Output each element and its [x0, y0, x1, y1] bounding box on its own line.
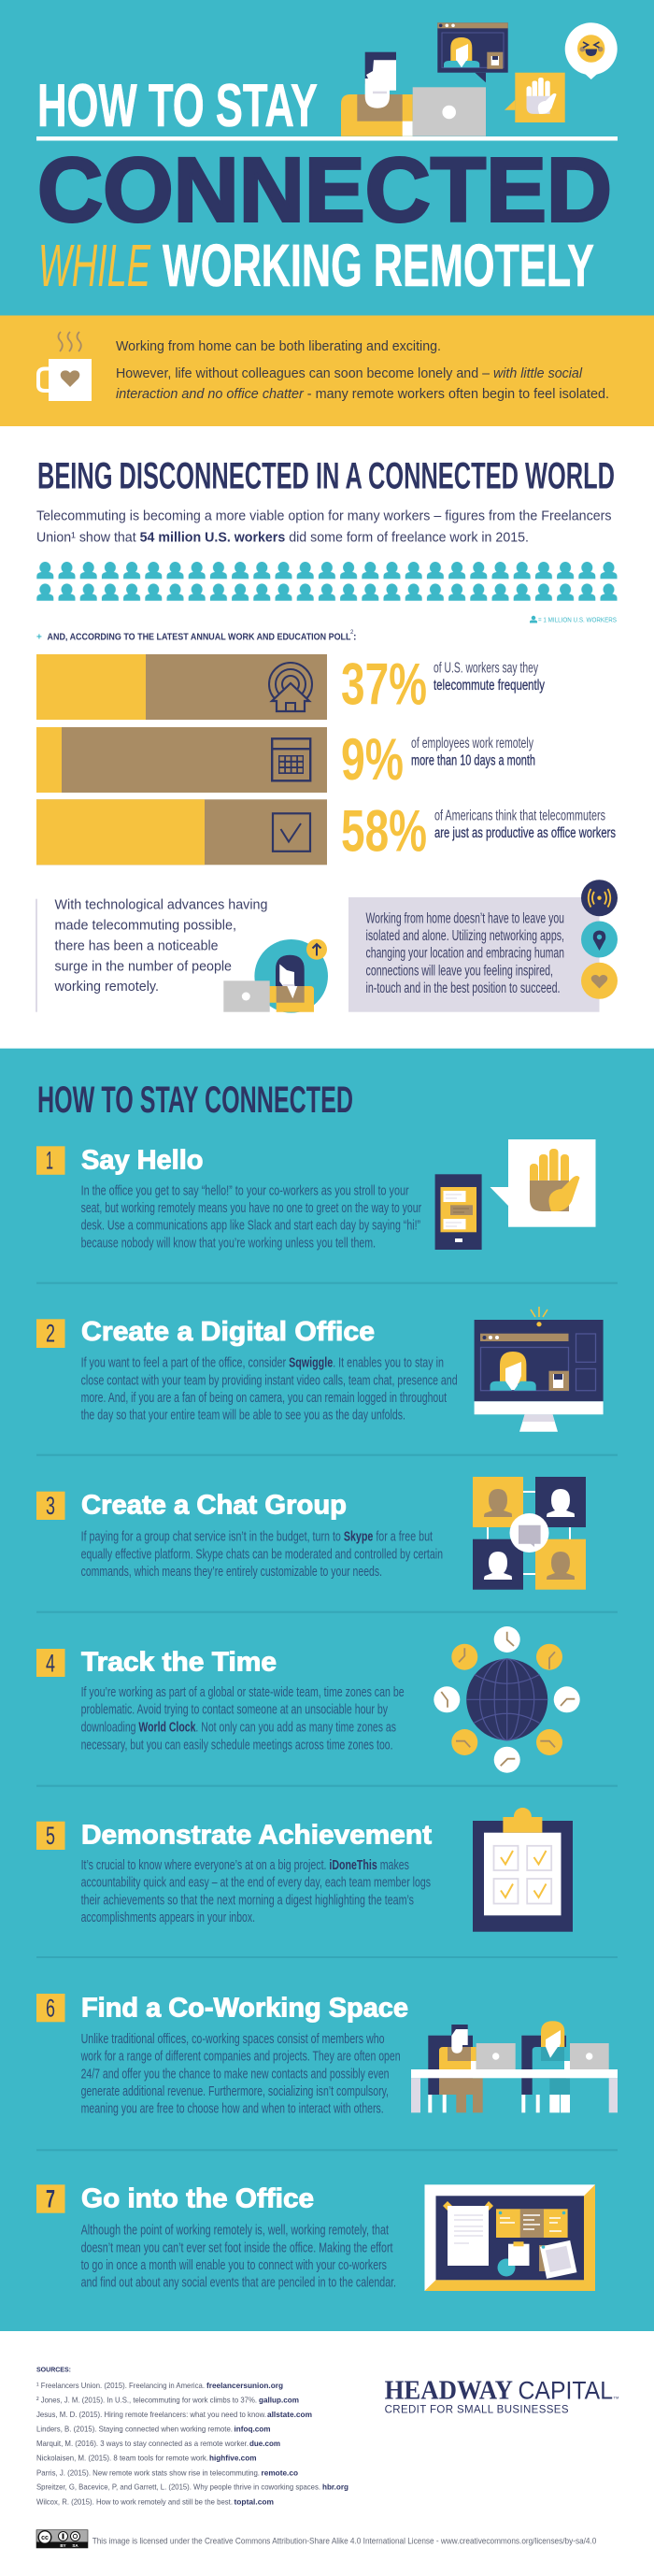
- illustration: smiling emoji bubble: [565, 22, 618, 79]
- legend: one million workers: = 1 MILLION U.S. WORKERS: [538, 618, 617, 624]
- step description: If paying for a group chat service isn’t in the budget, turn to Skype for a free but: [81, 1530, 433, 1545]
- number badge: 6: [46, 1995, 55, 2023]
- sources list: ¹ Freelancers Union. (2015). Freelancing in America.: [36, 2381, 205, 2390]
- step description: If you want to feel a part of the office, consider Sqwiggle. It enables you to stay in: [81, 1356, 444, 1371]
- step description: commands, which means they’re entirely customizable to your needs.: [81, 1565, 382, 1580]
- side note: surge in remote work: made telecommuting possible,: [54, 918, 236, 934]
- creative commons badge: SA: [72, 2543, 78, 2548]
- step 4: track the time: [36, 1626, 580, 1773]
- step description: [81, 1858, 431, 1925]
- sources list: remote.co: [262, 2468, 298, 2477]
- number badge: [36, 2184, 65, 2213]
- side note: surge in remote work: [36, 897, 267, 1012]
- step description: seat, but working remotely means you have no one to greet on the way to your: [81, 1201, 421, 1216]
- sources list: infoq.com: [234, 2425, 271, 2434]
- illustration: clipboard checklist: [473, 1808, 573, 1932]
- stat: 37 percent: [341, 651, 545, 717]
- intro paragraph: [36, 508, 611, 545]
- side note: surge in remote work: surge in the number of people: [54, 958, 232, 974]
- sources list: ² Jones, J. M. (2015). In U.S., telecommuting for work climbs to 37%.: [36, 2396, 257, 2405]
- step description: Unlike traditional offices, co-working spaces consist of members who: [81, 2032, 385, 2047]
- heading word: while: WHILE: [38, 232, 151, 299]
- heading line: how to stay: HOW TO STAY: [37, 71, 318, 139]
- step description: 24/7 and offer you the chance to make new contacts and possibly even: [81, 2067, 389, 2082]
- poll intro line: AND, ACCORDING TO THE LATEST ANNUAL WORK AND EDUCATION POLL: [47, 631, 351, 642]
- intro text: [116, 339, 609, 402]
- stat: 9 percent: [341, 727, 535, 793]
- license note: This image is licensed under the Creative Commons Attribution-Share Alike 4.0 International License - www.creativecommons.org/licenses/by-sa/4.0: [92, 2537, 596, 2546]
- step 3: chat group: [36, 1477, 586, 1590]
- illustration: group chat avatars: [473, 1477, 586, 1590]
- sources list: highfive.com: [209, 2454, 257, 2463]
- divider rule: [36, 136, 618, 140]
- icon: calendar: [272, 738, 310, 780]
- step description: [80, 2032, 401, 2117]
- illustration: phone chat: [435, 1174, 482, 1250]
- sources list: Marquit, M. (2016). 3 ways to stay connected as a remote worker.: [36, 2439, 249, 2448]
- stat: 37 percent: of U.S. workers say they: [434, 660, 538, 676]
- illustration: woman at laptop: [223, 939, 328, 1013]
- number badge: [36, 1822, 65, 1850]
- divider: [36, 1282, 618, 1284]
- callout: do not stay isolated: connections will leave you feeling inspired,: [366, 963, 553, 979]
- divider: [36, 1956, 618, 1958]
- pictogram: 54 million workers: [36, 562, 618, 601]
- section heading: HOW TO STAY CONNECTED: [37, 1080, 353, 1121]
- number badge: 5: [46, 1822, 55, 1850]
- panel: intro band: [0, 316, 654, 426]
- sources list: Nickolaisen, M. (2015). 8 team tools for remote work.: [36, 2454, 208, 2463]
- sources list: Spreitzer, G, Bacevice, P, and Garrett, L. (2015). Why people thrive in coworking spaces.: [36, 2483, 320, 2492]
- step description: meaning you are free to choose how and when to interact with others.: [81, 2102, 384, 2117]
- number badge: 7: [46, 2185, 55, 2213]
- logo: headway capital: CREDIT FOR SMALL BUSINESSES: [385, 2405, 569, 2416]
- sources heading: SOURCES:: [36, 2365, 71, 2373]
- step description: [81, 1183, 421, 1251]
- stat: 58 percent: 58%: [341, 799, 427, 865]
- step description: because nobody will know that you’re working unless you tell them.: [81, 1236, 376, 1251]
- hero background: [0, 0, 654, 316]
- step 6: co-working space: [36, 1993, 618, 2117]
- person one: [428, 2025, 516, 2112]
- sources list: due.com: [249, 2439, 280, 2448]
- bar: 9 percent: [36, 727, 327, 793]
- step description: more. And, if you are a fan of being on camera, you can remain logged in throughout: [81, 1391, 447, 1406]
- panel: being disconnected: [36, 456, 618, 1013]
- step description: accomplishments appears in your inbox.: [81, 1911, 255, 1925]
- sources list: Linders, B. (2015). Staying connected when working remote.: [36, 2425, 233, 2434]
- side note: surge in remote work: With technological advances having: [54, 897, 267, 913]
- section background: [0, 1049, 654, 2331]
- step description: necessary, but you can easily schedule meetings across time zones too.: [81, 1738, 392, 1753]
- icon: signal: [581, 880, 618, 916]
- step description: If you’re working as part of a global or state-wide team, time zones can be: [81, 1685, 405, 1700]
- bar: 37 percent: [36, 654, 327, 720]
- desk: [411, 2069, 618, 2112]
- step 7: go into the office: [36, 2184, 595, 2291]
- number badge: [36, 1492, 65, 1520]
- step description: doesn’t mean you can’t ever set foot inside the office. Making the effort: [81, 2240, 392, 2255]
- step description: problematic. Avoid trying to contact someone at an unsociable hour by: [81, 1703, 389, 1718]
- side note: surge in remote work: there has been a noticeable: [54, 937, 219, 953]
- bar: 58 percent: [36, 799, 327, 865]
- step description: and find out about any social events that are penciled in to the calendar.: [81, 2276, 396, 2291]
- step 5: demonstrate achievement: [36, 1808, 573, 1932]
- step title: Go into the Office: [81, 2184, 314, 2214]
- panel: hero header: [0, 0, 654, 316]
- icon: map pin: [581, 922, 618, 957]
- step 2: digital office: [36, 1307, 604, 1432]
- step description: [81, 2224, 396, 2291]
- icon: steaming mug: [38, 332, 92, 401]
- step description: work for a range of different companies and projects. They are often open: [80, 2050, 401, 2065]
- step title: Say Hello: [81, 1146, 204, 1176]
- poll intro line: +: [36, 632, 42, 642]
- creative commons badge: [36, 2530, 88, 2548]
- step description: desk. Use a communications app like Slack and start each day by saying “hi!”: [81, 1219, 420, 1234]
- stat: 9 percent: 9%: [341, 727, 404, 793]
- poll intro line: 2: [350, 630, 354, 636]
- icon: checkbox: [273, 813, 310, 852]
- stat: 37 percent: telecommute frequently: [434, 678, 545, 694]
- logo: headway capital: HEADWAY: [385, 2377, 513, 2406]
- legend: one million workers: [530, 616, 617, 624]
- step description: [81, 1685, 405, 1753]
- sources list: Jesus, M. D. (2015). Hiring remote freelancers: what you need to know.: [36, 2410, 266, 2419]
- step description: [81, 1530, 443, 1580]
- illustration: video call window: [437, 22, 508, 82]
- intro background: [0, 316, 654, 426]
- sources list: freelancersunion.org: [206, 2381, 283, 2390]
- sources list: allstate.com: [267, 2410, 312, 2419]
- intro paragraph: Telecommuting is becoming a more viable option for many workers – figures from the Freelancers: [36, 508, 611, 524]
- stat: 9 percent: of employees work remotely: [411, 736, 533, 751]
- step description: Although the point of working remotely is, well, working remotely, that: [81, 2224, 389, 2239]
- illustration: coworkers at desk: [411, 2021, 618, 2112]
- icon: heart: [581, 963, 618, 999]
- illustration: globe with clocks: [434, 1626, 580, 1773]
- divider: [36, 1611, 618, 1613]
- step description: [81, 1356, 458, 1424]
- step description: equally effective platform. Skype chats can be moderated and controlled by certain: [81, 1547, 443, 1562]
- sources list: Parris, J. (2015). New remote work stats show rise in telecommuting.: [36, 2468, 260, 2477]
- logo: headway capital: CAPITAL: [518, 2377, 613, 2405]
- illustration: raised hand speech bubble: [505, 73, 565, 122]
- step description: It’s crucial to know where everyone’s at on a big project. iDoneThis makes: [81, 1858, 409, 1873]
- intro text: Working from home can be both liberating and exciting.: [116, 339, 441, 354]
- step description: to go in once a month will enable you to connect with your co-workers: [81, 2258, 387, 2273]
- number badge: 2: [46, 1320, 55, 1348]
- illustration: desktop monitor video call: [475, 1307, 604, 1432]
- callout: do not stay isolated: changing your location and embracing human: [366, 946, 564, 962]
- stat: 9 percent: more than 10 days a month: [411, 753, 535, 769]
- illustration: man at laptop: [341, 52, 486, 136]
- illustration: raised hand bubble: [490, 1139, 596, 1227]
- person two: [521, 2021, 609, 2112]
- logo: headway capital: [385, 2377, 618, 2416]
- step title: Create a Chat Group: [81, 1490, 347, 1520]
- step title: Find a Co-Working Space: [81, 1993, 408, 2023]
- callout: do not stay isolated: [348, 897, 600, 1012]
- sources list: gallup.com: [259, 2396, 299, 2405]
- divider: [36, 1785, 618, 1787]
- number badge: [36, 1146, 65, 1175]
- intro text: However, life without colleagues can soon become lonely and – with little social: [116, 366, 583, 381]
- step description: accountability quick and easy – at the end of every day, each team member logs: [81, 1876, 431, 1891]
- step description: downloading World Clock. Not only can you add as many time zones as: [81, 1720, 396, 1735]
- step title: Track the Time: [81, 1647, 277, 1677]
- number badge: [36, 1649, 65, 1677]
- intro text: interaction and no office chatter - many remote workers often begin to feel isolated.: [116, 387, 609, 402]
- poll intro line: :: [353, 631, 357, 642]
- illustration: office notice board: [424, 2184, 595, 2291]
- callout: do not stay isolated: Working from home doesn’t have to leave you: [366, 910, 564, 926]
- number badge: 3: [46, 1492, 55, 1520]
- logo: headway capital: TM: [613, 2396, 618, 2400]
- number badge: 1: [46, 1147, 53, 1175]
- step description: generate additional revenue. Furthermore, socializing isn’t compulsory,: [81, 2084, 389, 2099]
- side note: surge in remote work: working remotely.: [54, 979, 159, 995]
- stat: 37 percent: 37%: [341, 651, 427, 717]
- step description: close contact with your team by providing instant video calls, team chat, presence and: [81, 1373, 458, 1388]
- stat: 58 percent: [341, 799, 616, 865]
- step title: Demonstrate Achievement: [81, 1820, 432, 1850]
- intro paragraph: Union¹ show that 54 million U.S. workers did some form of freelance work in 2015.: [36, 529, 529, 545]
- step description: their achievements so that the next morning a digest highlighting the team’s: [81, 1893, 414, 1908]
- step title: Create a Digital Office: [81, 1317, 375, 1347]
- number badge: [36, 1319, 65, 1348]
- creative commons badge: BY: [60, 2543, 66, 2548]
- creative commons badge: cc: [41, 2535, 49, 2541]
- panel: how to stay connected: [0, 1049, 654, 2331]
- divider: [36, 2149, 618, 2151]
- number badge: 4: [46, 1649, 55, 1677]
- callout: do not stay isolated: in-touch and in the best position to succeed.: [366, 980, 561, 996]
- sources list: hbr.org: [322, 2483, 348, 2492]
- divider: [36, 1454, 618, 1456]
- number badge: [36, 1994, 65, 2023]
- step description: In the office you get to say “hello!” to your co-workers as you stroll to your: [81, 1183, 409, 1198]
- panel: footer: [36, 2365, 618, 2548]
- step 1: say hello: [36, 1139, 596, 1251]
- step description: the day so that your entire team will be able to see you as the day unfolds.: [81, 1409, 405, 1424]
- sources list: [36, 2381, 348, 2506]
- heading word: connected: CONNECTED: [37, 138, 612, 241]
- sources list: Wilcox, R. (2015). How to work remotely and still be the best.: [36, 2497, 233, 2506]
- sources list: toptal.com: [234, 2497, 274, 2506]
- callout: do not stay isolated: isolated and alone. Utilizing networking apps,: [366, 928, 564, 944]
- icon: house with signal: [269, 663, 312, 711]
